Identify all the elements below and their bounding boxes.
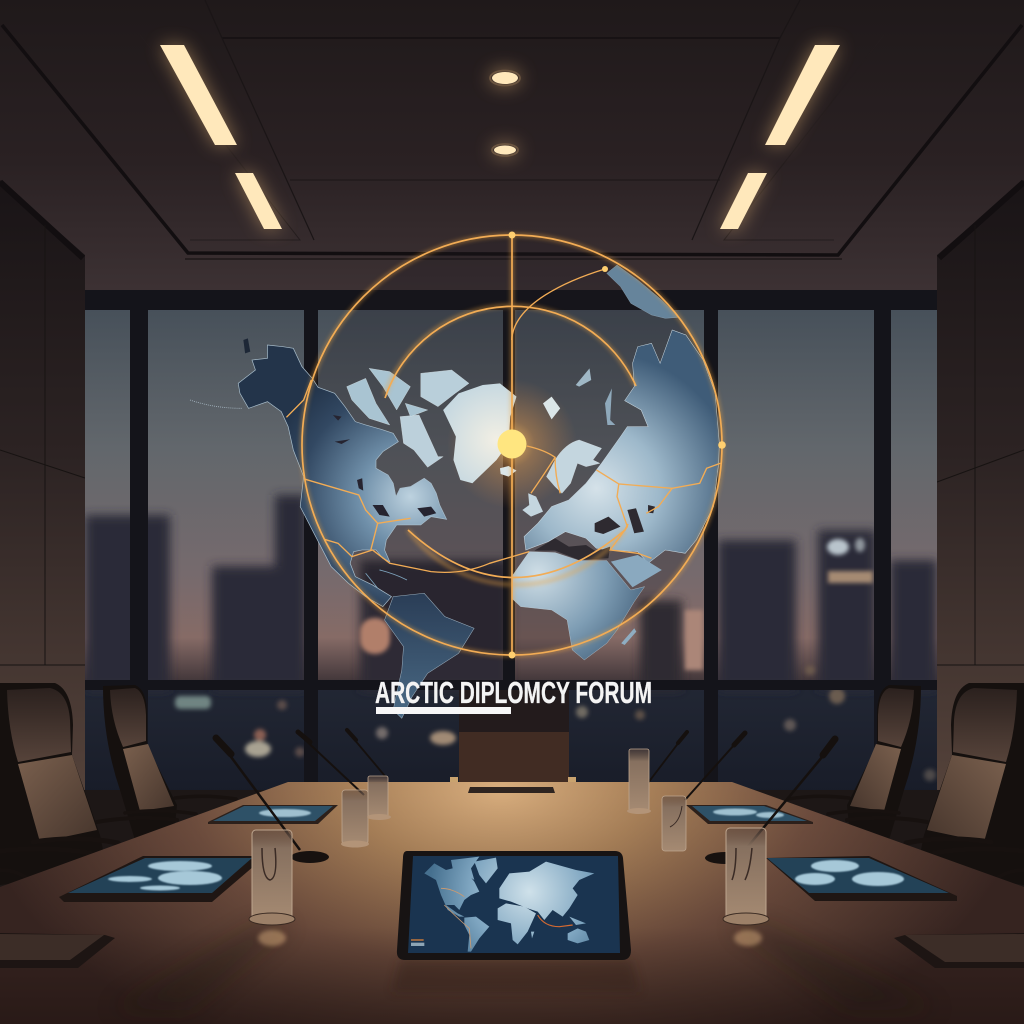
left wall — [0, 180, 85, 790]
glass right mid — [662, 796, 686, 851]
closed notebook left — [0, 933, 115, 968]
iceland and svalbard — [500, 368, 615, 477]
madagascar — [621, 628, 636, 645]
chairs right — [788, 683, 1024, 885]
glass left mid — [341, 790, 369, 848]
south america — [385, 593, 474, 718]
routes — [286, 235, 722, 655]
ceiling — [0, 0, 1024, 295]
british isles — [522, 493, 543, 517]
glasses and microphones — [216, 730, 835, 925]
microphone left far — [347, 730, 385, 776]
arabia — [611, 555, 662, 587]
glass right near — [723, 828, 769, 925]
central hub — [498, 430, 526, 458]
arctic globe hologram — [190, 232, 726, 718]
glass left near — [249, 830, 295, 925]
scandinavia — [546, 440, 602, 493]
closed notebook right — [894, 933, 1024, 968]
eurasia — [524, 330, 719, 563]
microphone right mid — [685, 733, 745, 800]
chukotka — [607, 265, 679, 318]
microphone left near — [216, 738, 329, 863]
tablet centre map — [411, 857, 594, 952]
globe tint disc — [302, 235, 722, 655]
ceiling lights — [160, 45, 840, 229]
tablet far right — [686, 805, 813, 824]
inland seas — [534, 505, 655, 560]
tablet far left — [208, 805, 338, 824]
alaska islands — [243, 338, 250, 353]
route nodes — [508, 232, 726, 658]
microphone left mid — [298, 732, 364, 795]
glass left far — [367, 776, 391, 820]
africa — [512, 552, 645, 660]
arctic islands — [347, 368, 469, 467]
tablet right — [766, 856, 957, 901]
hub halo — [447, 379, 577, 509]
table — [0, 782, 1024, 1024]
cuba and caribbean — [366, 570, 407, 588]
title underline — [376, 707, 511, 714]
tablet centre — [397, 851, 631, 960]
routes glow — [302, 235, 722, 655]
north america — [238, 345, 447, 607]
window mullions — [85, 288, 937, 790]
title: ARCTIC DIPLOMCY FORUM — [375, 675, 652, 710]
world map — [190, 265, 719, 718]
glass right far — [627, 749, 651, 814]
far chair — [450, 690, 576, 782]
chairs left — [0, 683, 236, 885]
window and blurred skyline — [85, 288, 937, 795]
greenland — [443, 383, 516, 483]
microphone right near — [705, 739, 835, 864]
right wall — [937, 180, 1024, 790]
microphone right far — [635, 732, 687, 800]
lakes — [333, 415, 436, 517]
tablet left — [59, 856, 254, 902]
